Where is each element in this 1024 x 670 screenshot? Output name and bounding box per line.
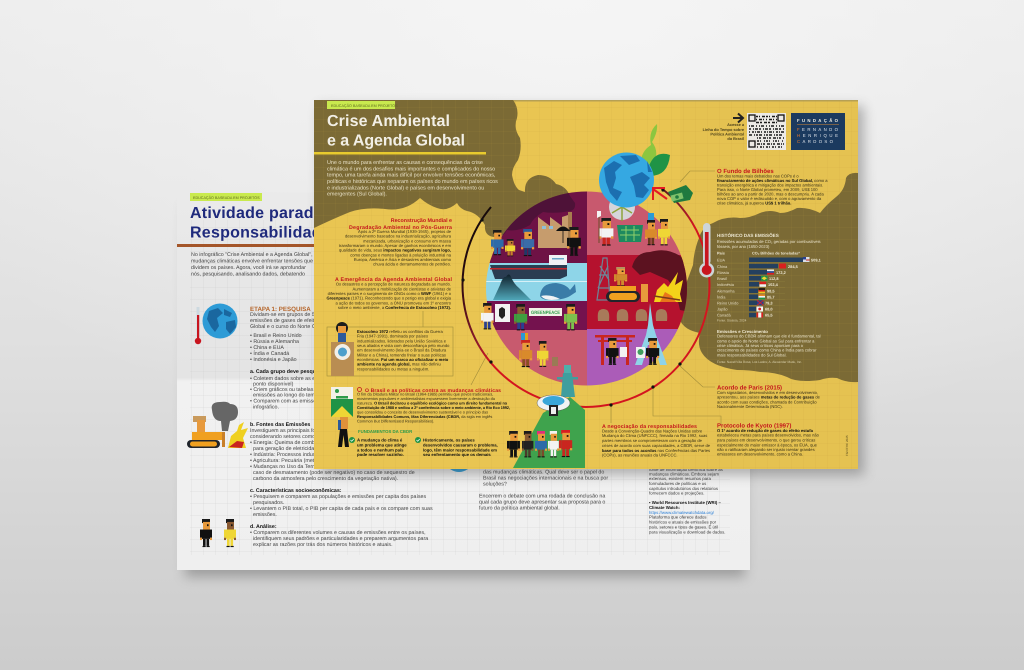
tag: educação baseada em projetos: [327, 101, 398, 109]
text: acordo de paris: [717, 384, 821, 409]
text: chart subtitle: Emissões acumuladas de CO₂ geradas por combustíveis: [717, 239, 821, 244]
icon: globe edge behind sheet: [450, 469, 468, 472]
text: seção a: ponto disponível): [253, 382, 294, 388]
icon: money: [668, 185, 693, 203]
text: acordo de paris: apresentou, aos países metas de redução de gases de: [717, 395, 821, 400]
icon: factory: [538, 212, 572, 248]
text: reconstrução mundial: transformaram o mundo. Apesar de ganhos econômicos e em: [339, 243, 452, 248]
text: emissões e crescimento: crise climática. Já seus críticos apontam para o: [717, 343, 804, 348]
text: etapa 1: emissões de gases de efeito estufa: [250, 318, 333, 324]
panel: logo fundação fernando henrique cardoso: F ERNANDO: [797, 127, 839, 132]
text: protocolo de kyoto: para países em desenvolvimento, o que gerou críticas: [717, 437, 815, 442]
text: seção a: a. Cada grupo deve pesquisar:: [250, 369, 327, 375]
chart rows: Alemanha: [717, 288, 735, 293]
text: seção b: [250, 422, 415, 482]
text: etapa 1: [250, 312, 333, 330]
callout: historicamente: desenvolvidos causaram o problema,: [423, 442, 498, 448]
text: fontes column: para visualização e download de dados.: [649, 530, 725, 534]
intro text: Une o mundo para enfrentar as causas e consequências da crise: [327, 160, 483, 166]
intro text: No infográfico "Crise Ambiental e a Agenda Global", as: [191, 252, 320, 258]
text: o brasil e as políticas: [357, 388, 510, 424]
text: fontes column: fornecem dados e projeções.: [649, 490, 704, 496]
text: o fundo de bilhões: [717, 168, 828, 206]
text: seção d: d. Análise:: [250, 524, 277, 530]
text: o fundo de bilhões: bilhões ao ano a partir de 2020, mas o descumpriu. A cada: [717, 191, 824, 196]
text: acordo de paris: Nacionalmente Determinada (NDC).: [717, 404, 783, 409]
heading: atividade: Atividade paradidática: [190, 205, 366, 222]
text: seção a: • Criem gráficos ou tabelas: [250, 387, 314, 393]
figures: protesters and signs: GREENPEACE: [531, 310, 561, 316]
text: seção c: pesquisados.: [253, 500, 284, 506]
text: seção a: [250, 369, 335, 410]
cloud: top-left brown area: [314, 100, 575, 237]
text: estocolmo: [357, 329, 450, 371]
callout: a mudança do clima: A mudança do clima é: [357, 438, 403, 442]
text: reconstrução mundial: como doenças e mortes ligadas à poluição industrial na: [350, 252, 452, 257]
text: o brasil e as políticas: O fim da Ditadura Militar no Brasil (1964-1985) permitiu que povos tradicionais,: [357, 392, 493, 396]
text: fontes column: formuladores de políticas e os: [649, 481, 706, 486]
text: seção b: • Energia: Queima de combustíveis: [250, 440, 333, 446]
text: protocolo de kyoto: O 1º acordo de redução de gases do efeito estufa: [717, 428, 814, 433]
panel: logo fundação fernando henrique cardoso: [791, 113, 845, 150]
text: seção b: considerando setores como:: [250, 434, 317, 440]
chart rows: 509,1: [811, 258, 822, 262]
heading: etapa 1: ETAPA 1: PESQUISA: [250, 306, 311, 313]
text: protocolo de kyoto: emissores em desenvolvimento, como a China.: [717, 452, 803, 457]
text: estocolmo: econômicas. Foi um marco ao oficializar o meio: [357, 357, 449, 362]
text: a negociação da responsabilidade: partes membros se comprometeram com a geração de: [602, 438, 703, 443]
callout: a mudança do clima: a todos e nenhum país: [357, 447, 404, 452]
icon: fire: [654, 272, 683, 302]
text: estocolmo: responsabilidades ou metas a ninguém.: [357, 366, 429, 371]
text: emergência da agenda: Os desastres e a percepção de natureza degradada ao mundo.: [336, 282, 451, 287]
text: protocolo de kyoto: Protocolo de Kyoto (1997): [717, 422, 791, 430]
text: seção c: • Pesquisem e comparem as populações e emissões per capita dos países: [250, 494, 427, 500]
list: países: • Brasil e Reino Unido: [250, 333, 302, 339]
text: seção c: [250, 488, 433, 518]
callout: a mudança do clima: um problema que atinge: [357, 442, 407, 448]
figures: protesters and signs: [481, 303, 577, 330]
text: emergência da agenda: [326, 277, 453, 310]
intro text: dividem os países. Agora, você irá se aprofundar: [191, 265, 306, 271]
text: reconstrução mundial: mecanizada, urbanização e consumo em massa: [363, 238, 452, 243]
text: estocolmo: ambiente na agenda global, mas não definiu: [357, 362, 441, 367]
icon: qr code: [747, 113, 786, 150]
icon: oil ship: [490, 255, 567, 279]
text: reconstrução mundial: [339, 218, 452, 267]
heading: histórico: HISTÓRICO DAS EMISSÕES: [717, 232, 779, 238]
text: protocolo de kyoto: estabeleceu metas para países desenvolvidos, mas não: [717, 433, 820, 438]
list: países: • China e EUA: [250, 345, 284, 351]
text: o brasil e as políticas: Common But Differentiated Responsibilities).: [357, 418, 434, 424]
text: emissões e crescimento: Fonte: Nacef/Villa Rosa; Los Lados; A. Alexander Musk, Inc.: [717, 360, 802, 364]
text: a negociação da responsabilidade: (COPs), as reuniões anuais da UNFCCC.: [602, 452, 678, 458]
text: seção b: • Agricultura: Pecuária (metano): [250, 458, 325, 464]
text: debate column: soluções?: [483, 482, 507, 488]
text: estocolmo: em desenvolvimento (leia-se o Brasil da Ditadura: [357, 348, 447, 353]
text: fontes column: • World Resources Institute (WRI) –: [649, 500, 721, 505]
list: países: • Rússia e Alemanha: [250, 339, 299, 345]
text: fontes column: Plataforma que oferece dados: [649, 514, 707, 520]
text: o fundo de bilhões: Um dos temas mais debatidos nas COPs é o: [717, 174, 799, 178]
text: seção b: para geração de eletricidade: [253, 446, 320, 452]
text: debate column: Encerrem o debate com uma rodada de conclusão na: [479, 494, 605, 500]
text: fontes column: fonte de informação científica sobre as: [649, 467, 723, 472]
arrow: red arrowhead: [653, 188, 667, 200]
text: reconstrução mundial: Após a 2ª Guerra Mundial (1939-1945), projetos de: [358, 229, 452, 234]
text: o fundo de bilhões: financiamento de ações climáticas no Sul Global, como a: [717, 178, 828, 183]
chart rows: 112,8: [769, 276, 779, 281]
text: acesse a linha do tempo: Política Ambiental: [710, 132, 744, 136]
text: emergência da agenda: sobre o meio ambiente, a Conferência de Estocolmo (1972).: [338, 305, 451, 310]
text: protocolo de kyoto: não o ratificaram alegando ser injusto isentar grandes: [717, 447, 815, 452]
callout: a mudança do clima: [349, 437, 407, 457]
callout: historicamente: [415, 437, 498, 457]
leader line: emergência to box: [423, 311, 488, 385]
tag: educação baseada em projetos: EDUCAÇÃO BASEADA EM PROJETOS: [331, 103, 398, 108]
text: fontes column: [649, 467, 725, 534]
flags: [756, 257, 810, 318]
intro text: e industrializados (Norte Global) e países em desenvolvimento ou: [327, 186, 484, 192]
front sheet: infográfico: [314, 100, 864, 475]
text: fontes column: históricos e atuais de emissões por: [649, 520, 717, 524]
text: seção a: • Coletem dados sobre as emissões: [250, 376, 335, 382]
text: seção d: identifiquem seus padrões e particularidades e preparem argumentos para: [253, 536, 428, 542]
text: chart source: Fonte: Statista, 2024: [717, 318, 747, 322]
icon: wind turbine: [609, 194, 635, 221]
text: seção c: • Levantem o PIB total, o PIB per capita de cada país e os compare com suas: [250, 506, 433, 512]
figure: speaker: [336, 322, 348, 342]
text: seção b: Investiguem as principais fontes: [250, 428, 326, 434]
text: o brasil e as políticas: O Brasil e as políticas contra as mudanças climáticas: [365, 388, 501, 394]
chart: histórico das emissões: [717, 232, 822, 322]
chart rows: Índia: [717, 294, 726, 299]
figure: man holding constitution: [338, 417, 349, 447]
text: etapa 1: Global e o curso do Norte Global.: [250, 324, 329, 330]
figure: man with top hat: [567, 227, 581, 256]
tag: educação baseada em projetos: EDUCAÇÃO BASEADA EM PROJETOS: [193, 195, 260, 200]
text: seção a: • Comparem com as emissões: [250, 398, 322, 404]
icon: solar, axe man and indigenous people: [597, 211, 670, 246]
text: fontes column: extensos, existem resumos para: [649, 476, 711, 481]
text: emergência da agenda: Greenpeace (1971). Reconhecendo que o perigo era global e exigia: [326, 296, 452, 301]
text: seção c: emissões.: [253, 512, 277, 518]
text: acesse a linha do tempo: [703, 122, 745, 141]
chart rows: 284,5: [788, 264, 799, 269]
text: debate column: qual cada grupo deve apresentar sua proposta para o: [479, 500, 605, 506]
text: a negociação da responsabilidade: Mudança do Clima (UNFCCC), firmada na Rio 1992, suas: [602, 433, 707, 438]
chart rows: China: [717, 264, 728, 269]
icon: thermometer: [699, 223, 714, 278]
text: o fundo de bilhões: O Fundo de Bilhões: [717, 168, 774, 175]
chart rows: Rússia: [717, 270, 730, 275]
panel: logo fundação fernando henrique cardoso: FUNDAÇÃO: [797, 118, 839, 123]
text: a negociação da responsabilidade: A negociação da responsabilidades: [602, 424, 697, 430]
icon: oil rig: [597, 258, 610, 300]
icon: oil spill: [493, 274, 531, 300]
chart rows: 85,7: [767, 294, 775, 299]
icon: tree stumps: [598, 309, 667, 321]
intro text: tempo, uma tarefa ainda mais difícil por envolver tensões econômicas,: [327, 173, 496, 179]
chart rows: 68,0: [765, 307, 773, 312]
intro text: [191, 252, 320, 278]
text: etapa 1: Dividam-se em grupos de 5 alunos.: [250, 312, 333, 318]
chart: central timeline circle: [480, 184, 690, 386]
text: debate column: futuro da política ambiental global.: [479, 506, 560, 512]
decorative leader lines: [611, 171, 721, 425]
icon: umbrella: [556, 226, 570, 243]
figures: family: [491, 229, 534, 256]
text: seção d: • Comparem os diferentes volumes e causas de emissões entre os países,: [250, 530, 426, 536]
text: chart subtitle: fósseis, por ano (1850-2023): [717, 244, 770, 249]
icon: whale: [540, 283, 576, 300]
panel: green path: [513, 397, 585, 468]
figures: indigenous woman and companion: [519, 333, 558, 367]
text: fontes column: capítulos introdutórios dos relatórios: [649, 486, 718, 491]
text: reconstrução mundial: chuva ácida e derramamentos de petróleo.: [373, 262, 451, 267]
chart rows: 79,3: [765, 300, 773, 305]
icon: globe and thermometer: [195, 304, 238, 344]
text: debate column: das mudanças climáticas. Qual deve ser o papel do: [483, 470, 604, 476]
text: estocolmo: Militar e a China), temendo freiar o suas políticas: [357, 352, 446, 357]
intro text: [327, 160, 498, 198]
divider: heading rule: [177, 244, 317, 247]
chart rows: [717, 257, 822, 318]
text: reconstrução mundial: Reconstrução Mundial e: [391, 218, 452, 224]
heading: atividade: Responsabilidade: [190, 224, 331, 242]
text: seção c: c. Características socioeconômicas:: [250, 488, 342, 494]
text: a negociação da responsabilidade: base para todos os acordos nas Conferências das Partes: [602, 448, 710, 453]
text: seção b: • Mudanças no Uso da Terra: [250, 464, 317, 470]
list: países: [250, 333, 302, 363]
divider: title rule: [314, 152, 486, 154]
icon: torii gate: [595, 335, 635, 365]
text: reconstrução mundial: Europa, América e Ásia e desastres ambientais como: [354, 257, 452, 262]
list: países: • Índia e Canadá: [250, 350, 289, 357]
icon: constituição banner: [331, 387, 353, 417]
text: estocolmo: seus aliados e vista com desconfiança pelo mundo: [357, 343, 450, 348]
chart rows: 172,2: [776, 270, 787, 275]
list: países: • Indonésia e Japão: [250, 357, 297, 363]
text: seção a: infográfico.: [253, 404, 279, 410]
icon: podium with UN seal: [331, 342, 354, 376]
panel: estocolmo 1972: [327, 322, 453, 376]
text: estocolmo: Fria (1947-1991), dominada por países: [357, 334, 428, 338]
panel: logo fundação fernando henrique cardoso: H ENRIQUE: [797, 133, 838, 138]
text: debate column: Brasil nas negociações internacionais e na busca por: [483, 476, 608, 482]
text: a negociação da responsabilidade: crises de acordo com suas capacidades, a CBDR, serve de: [602, 443, 711, 448]
heading: atividade: [190, 205, 366, 242]
text: estocolmo: Estocolmo 1972 refletiu os conflitos da Guerra: [357, 329, 444, 334]
text: o brasil e as políticas: movimentos populares e ambientalistas expusessem livremente a destruição da: [357, 396, 496, 401]
chart rows: Canadá: [717, 313, 731, 318]
text: a negociação da responsabilidade: Desde a Convenção-Quadro das Nações Unidas sobre: [602, 428, 703, 434]
text: o brasil e as políticas: natureza. O Brasil declarou o equilíbrio ecológico como um direito fundamental na: [357, 400, 508, 406]
title: [327, 113, 465, 150]
callout: historicamente: seu enfrentamento que os demais: [423, 452, 491, 457]
chart header: [717, 252, 800, 256]
text: acesse a linha do tempo: Acesse a: [727, 122, 745, 127]
icon: statue: [557, 365, 578, 397]
title: Crise Ambiental: [327, 113, 450, 130]
text: fontes column: país, setores e tipos de gases. É útil: [649, 524, 718, 530]
arrow: timeline ring: [461, 188, 710, 407]
figures: world leaders: [507, 430, 572, 457]
text: reconstrução mundial: qualidade de vida, seus impactos negativos surgiram logo,: [339, 248, 451, 253]
text: acordo de paris: acordo com suas condições, chamada de Contribuição: [717, 399, 817, 404]
text: o brasil e as políticas: Responsabilidades Comuns, Mas Diferenciadas (CBDR, da sigla em inglês: [357, 414, 492, 419]
text: emissões e crescimento: mais responsabilidades do Sul Global.: [717, 352, 787, 357]
callout: a mudança do clima: pode resolver sozinho.: [357, 452, 404, 457]
text: o fundo de bilhões: transição energética e mitigação dos impactos ambientais.: [717, 182, 823, 187]
figures: two characters: [200, 519, 236, 547]
text: o fundo de bilhões: Para isso, o Norte Global prometeu, em 2009, US$ 100: [717, 187, 818, 192]
text: seção b: b. Fontes das Emissões: [250, 422, 310, 428]
text: seção a: emissões ao longo do tempo: [253, 392, 321, 398]
text: edition note: FGV/FHC 2025: [845, 435, 849, 456]
chart rows: EUA: [717, 258, 725, 262]
text: emergência da agenda: diferentes países e o surgimento de ONGs como o WWF (1961) e o: [328, 291, 452, 296]
text: seção d: explicar as razões por trás dos números históricos e atuais.: [253, 542, 393, 548]
text: emissões e crescimento: como o apoio do Norte Global ao Sul para enfrentar a: [717, 338, 815, 343]
text: acordo de paris: Com signatários, desenvolvidos e em desenvolvimento,: [717, 390, 818, 395]
icon: globe: [599, 152, 654, 208]
icon: bulldozer: [606, 267, 648, 302]
text: protocolo de kyoto: especialmente do maior emissor à época, os EUA, que: [717, 442, 818, 447]
text: acordo de paris: Acordo de Paris (2015): [717, 384, 782, 392]
text: emergência da agenda: Aumentaram a mobilização de cientistas e ativistas de: [352, 286, 452, 291]
chart rows: Reino Unido: [717, 300, 738, 305]
text: o fundo de bilhões: crise climática, já superou US$ 1 trilhão.: [717, 200, 791, 206]
icon: bulldozer and fire: [187, 402, 248, 448]
chart rows: Japão: [717, 307, 728, 312]
title: e a Agenda Global: [327, 132, 465, 150]
figures: negotiators in japan: [606, 338, 659, 365]
text: reconstrução mundial: Degradação Ambiental no Pós-Guerra: [349, 225, 452, 231]
text: o fundo de bilhões: nova COP o valor é rediscutido e, com o agravamento da: [717, 196, 822, 201]
chart rows: 98,5: [767, 288, 775, 293]
heading: fundamentos da cbdr: FUNDAMENTOS DA CBDR: [358, 429, 413, 434]
text: debate column: [479, 470, 608, 512]
text: acesse a linha do tempo: do Brasil: [727, 136, 744, 141]
text: reconstrução mundial: desenvolvimento baseados na industrialização, agricultura: [345, 234, 452, 239]
text: seção b: caso de desmatamento (pode ser negativo) no caso de sequestro de: [253, 470, 415, 476]
intro text: mudanças climáticas envolve enfrentar tensões que: [191, 258, 313, 264]
panel: logo fundação fernando henrique cardoso: C ARDOSO: [797, 139, 834, 144]
text: emergência da agenda: A Emergência da Agenda Ambiental Global: [335, 277, 453, 283]
icon: tokyo tower: [635, 303, 667, 365]
chart header: CO₂ Bilhões de toneladas*: [752, 252, 800, 256]
intro text: políticas e históricas que separam os países do mundo em países ricos: [327, 179, 498, 185]
text: o brasil e as políticas: Constituição de 1988 e sediou a 2ª conferência sobre o meio ambiente, a Rio Eco 1992,: [357, 405, 510, 410]
text: emissões e crescimento: [717, 329, 821, 364]
callout: historicamente: logo, têm maior responsabilidade em: [423, 447, 497, 452]
icon: arrow to qr: [733, 114, 743, 122]
icon: fountain: [537, 395, 570, 416]
text: o brasil e as políticas: que consolidou o conceito de desenvolvimento sustentável e o princípio das: [357, 410, 488, 414]
text: fontes column: https://www.climatewatchdata.org/: [649, 510, 715, 515]
intro text: nós, pesquisando, analisando dados, debatendo: [191, 272, 305, 278]
text: emergência da agenda: a ação de todos os governos, a ONU promoveu em 1º encontro: [335, 300, 452, 305]
chart header: País: [717, 252, 725, 256]
callout: historicamente: Historicamente, os países: [423, 438, 475, 442]
cloud: right brown area: [680, 173, 858, 382]
text: estocolmo: industrializados, liderados pela União Soviética e: [357, 338, 447, 343]
text: a negociação da responsabilidade: [602, 424, 711, 458]
cloud: dark smoke over purple: [502, 193, 576, 236]
cloud: dark smoke over crimson: [632, 250, 690, 312]
text: emissões e crescimento: Defensores do CBDR afirmam que ele é fundamental, tal: [717, 334, 821, 338]
chart rows: 102,4: [768, 282, 779, 287]
tag: educação baseada em projetos: [190, 193, 262, 201]
intro text: emergentes (Sul Global).: [327, 192, 387, 198]
chart rows: Brasil: [717, 276, 727, 281]
text: emissões e crescimento: crescimento de países como China e Índia para cobrar: [717, 348, 817, 353]
intro text: climática é um dos desafios mais importantes e complicados do nosso: [327, 166, 495, 172]
text: acesse a linha do tempo: Linha do Tempo sobre: [703, 127, 745, 132]
chart rows: Indonésia: [717, 282, 735, 287]
text: seção b: • Indústria: Processos industriais: [250, 452, 327, 458]
text: fontes column: Climate Watch:: [649, 505, 680, 510]
chart rows: 65,5: [765, 313, 773, 318]
text: fontes column: mudanças climáticas. Embora sejam: [649, 472, 719, 476]
text: seção d: [250, 524, 428, 548]
text: chart subtitle: [717, 239, 821, 249]
back sheet: atividade: [177, 193, 750, 577]
text: protocolo de kyoto: [717, 422, 820, 457]
text: seção b: carbono da atmosfera pelo crescimento da vegetação nativa).: [253, 476, 398, 482]
icon: leaves: [641, 124, 670, 176]
text: emissões e crescimento: Emissões e Crescimento: [717, 329, 768, 334]
